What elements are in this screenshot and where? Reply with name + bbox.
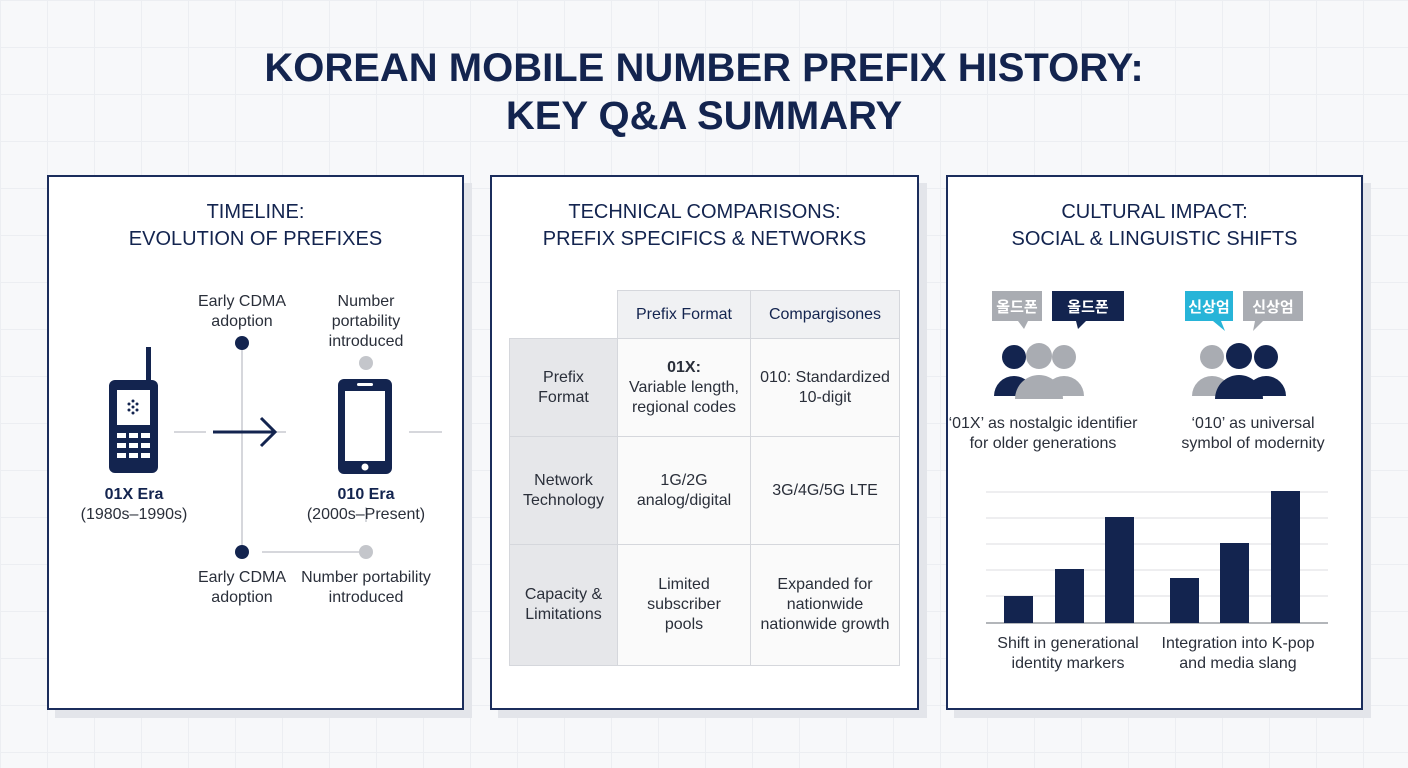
- text: 010 modernity: ‘010’ as universal: [1191, 415, 1315, 432]
- panel: timeline: [47, 175, 464, 710]
- comparison table: Compargisones: [769, 306, 881, 322]
- text: 01X nostalgic: ‘01X’ as nostalgic identifier: [949, 415, 1137, 432]
- heading: technical: TECHNICAL COMPARISONS:: [568, 201, 841, 223]
- label: portability top: [329, 293, 403, 350]
- label: 01X era: 01X Era: [105, 486, 163, 503]
- comparison table: Prefix Format: [636, 306, 732, 322]
- comparison table: nationwide: [787, 596, 863, 613]
- label: early cdma top: Early CDMA: [198, 293, 286, 310]
- text: 010 modernity: symbol of modernity: [1181, 435, 1325, 452]
- label: portability bottom: Number portability: [301, 569, 431, 586]
- bar chart: [986, 491, 1328, 624]
- label: 01X era: (1980s–1990s): [81, 506, 187, 523]
- text: chart label 1: Shift in generational: [997, 635, 1139, 652]
- text: chart label 1: [997, 635, 1139, 672]
- label: early cdma top: [198, 293, 286, 330]
- label: portability top: introduced: [329, 333, 403, 350]
- label: early cdma top: adoption: [211, 313, 273, 330]
- text: chart label 1: identity markers: [1012, 655, 1124, 672]
- title: [264, 46, 1144, 138]
- comparison table: regional codes: [632, 398, 736, 416]
- title: KOREAN MOBILE NUMBER PREFIX HISTORY:: [264, 46, 1144, 90]
- label: 010 era: (2000s–Present): [307, 506, 425, 523]
- label: portability bottom: introduced: [329, 589, 403, 606]
- icon: old phone: [109, 347, 158, 473]
- label: portability bottom: [301, 569, 431, 606]
- comparison table: 1G/2G: [660, 472, 708, 488]
- panel: technical comparisons: [490, 175, 919, 710]
- comparison table: Capacity &: [525, 586, 602, 603]
- comparison table: nationwide growth: [761, 616, 889, 633]
- heading: cultural: [1012, 201, 1297, 250]
- comparison table: Expanded for: [777, 576, 873, 593]
- comparison table: [509, 290, 900, 666]
- comparison table: Technology: [523, 492, 604, 508]
- heading: timeline: EVOLUTION OF PREFIXES: [129, 228, 382, 250]
- comparison table: Network: [534, 472, 593, 488]
- label: 01X era: [81, 486, 187, 523]
- icons: speech bubbles and people: 신상엄: [1252, 296, 1294, 317]
- label: portability top: Number: [338, 293, 394, 310]
- comparison table: analog/digital: [637, 492, 731, 508]
- label: early cdma bottom: adoption: [211, 589, 273, 606]
- label: 010 era: [307, 486, 425, 523]
- text: 01X nostalgic: [949, 415, 1138, 452]
- text: chart label 2: [1162, 635, 1314, 672]
- label: 010 era: 010 Era: [338, 486, 394, 503]
- comparison table: 01X:: [667, 358, 701, 376]
- panel: cultural impact: [946, 175, 1363, 710]
- comparison table: Prefix: [543, 368, 584, 386]
- label: portability top: portability: [332, 313, 400, 330]
- comparison table: Limitations: [525, 606, 602, 623]
- heading: timeline: TIMELINE:: [207, 201, 304, 223]
- label: early cdma bottom: [198, 569, 286, 606]
- icons: speech bubbles and people: [992, 291, 1303, 399]
- comparison table: 010: Standardized: [760, 368, 890, 386]
- arrow: [213, 418, 275, 446]
- timeline diagram: [109, 336, 442, 559]
- text: chart label 2: and media slang: [1179, 655, 1297, 672]
- text: 01X nostalgic: for older generations: [970, 435, 1116, 452]
- comparison table: Variable length,: [629, 378, 739, 396]
- heading: cultural: CULTURAL IMPACT:: [1061, 201, 1248, 223]
- title: KEY Q&A SUMMARY: [506, 94, 902, 138]
- icons: speech bubbles and people: 올드폰: [996, 296, 1038, 317]
- heading: technical: [543, 201, 866, 250]
- comparison table: Limited: [658, 576, 710, 593]
- heading: cultural: SOCIAL & LINGUISTIC SHIFTS: [1012, 228, 1297, 250]
- icon: smartphone: [338, 379, 392, 474]
- heading: timeline: [129, 201, 382, 250]
- label: early cdma bottom: Early CDMA: [198, 569, 286, 586]
- icons: speech bubbles and people: 신상엄: [1188, 296, 1230, 317]
- comparison table: pools: [665, 616, 703, 633]
- text: 010 modernity: [1181, 415, 1325, 452]
- text: chart label 2: Integration into K-pop: [1162, 635, 1314, 652]
- comparison table: 10-digit: [799, 388, 851, 406]
- icons: speech bubbles and people: 올드폰: [1067, 296, 1109, 317]
- comparison table: subscriber: [647, 596, 721, 613]
- heading: technical: PREFIX SPECIFICS & NETWORKS: [543, 228, 866, 250]
- comparison table: 3G/4G/5G LTE: [772, 482, 878, 498]
- comparison table: Format: [538, 388, 589, 406]
